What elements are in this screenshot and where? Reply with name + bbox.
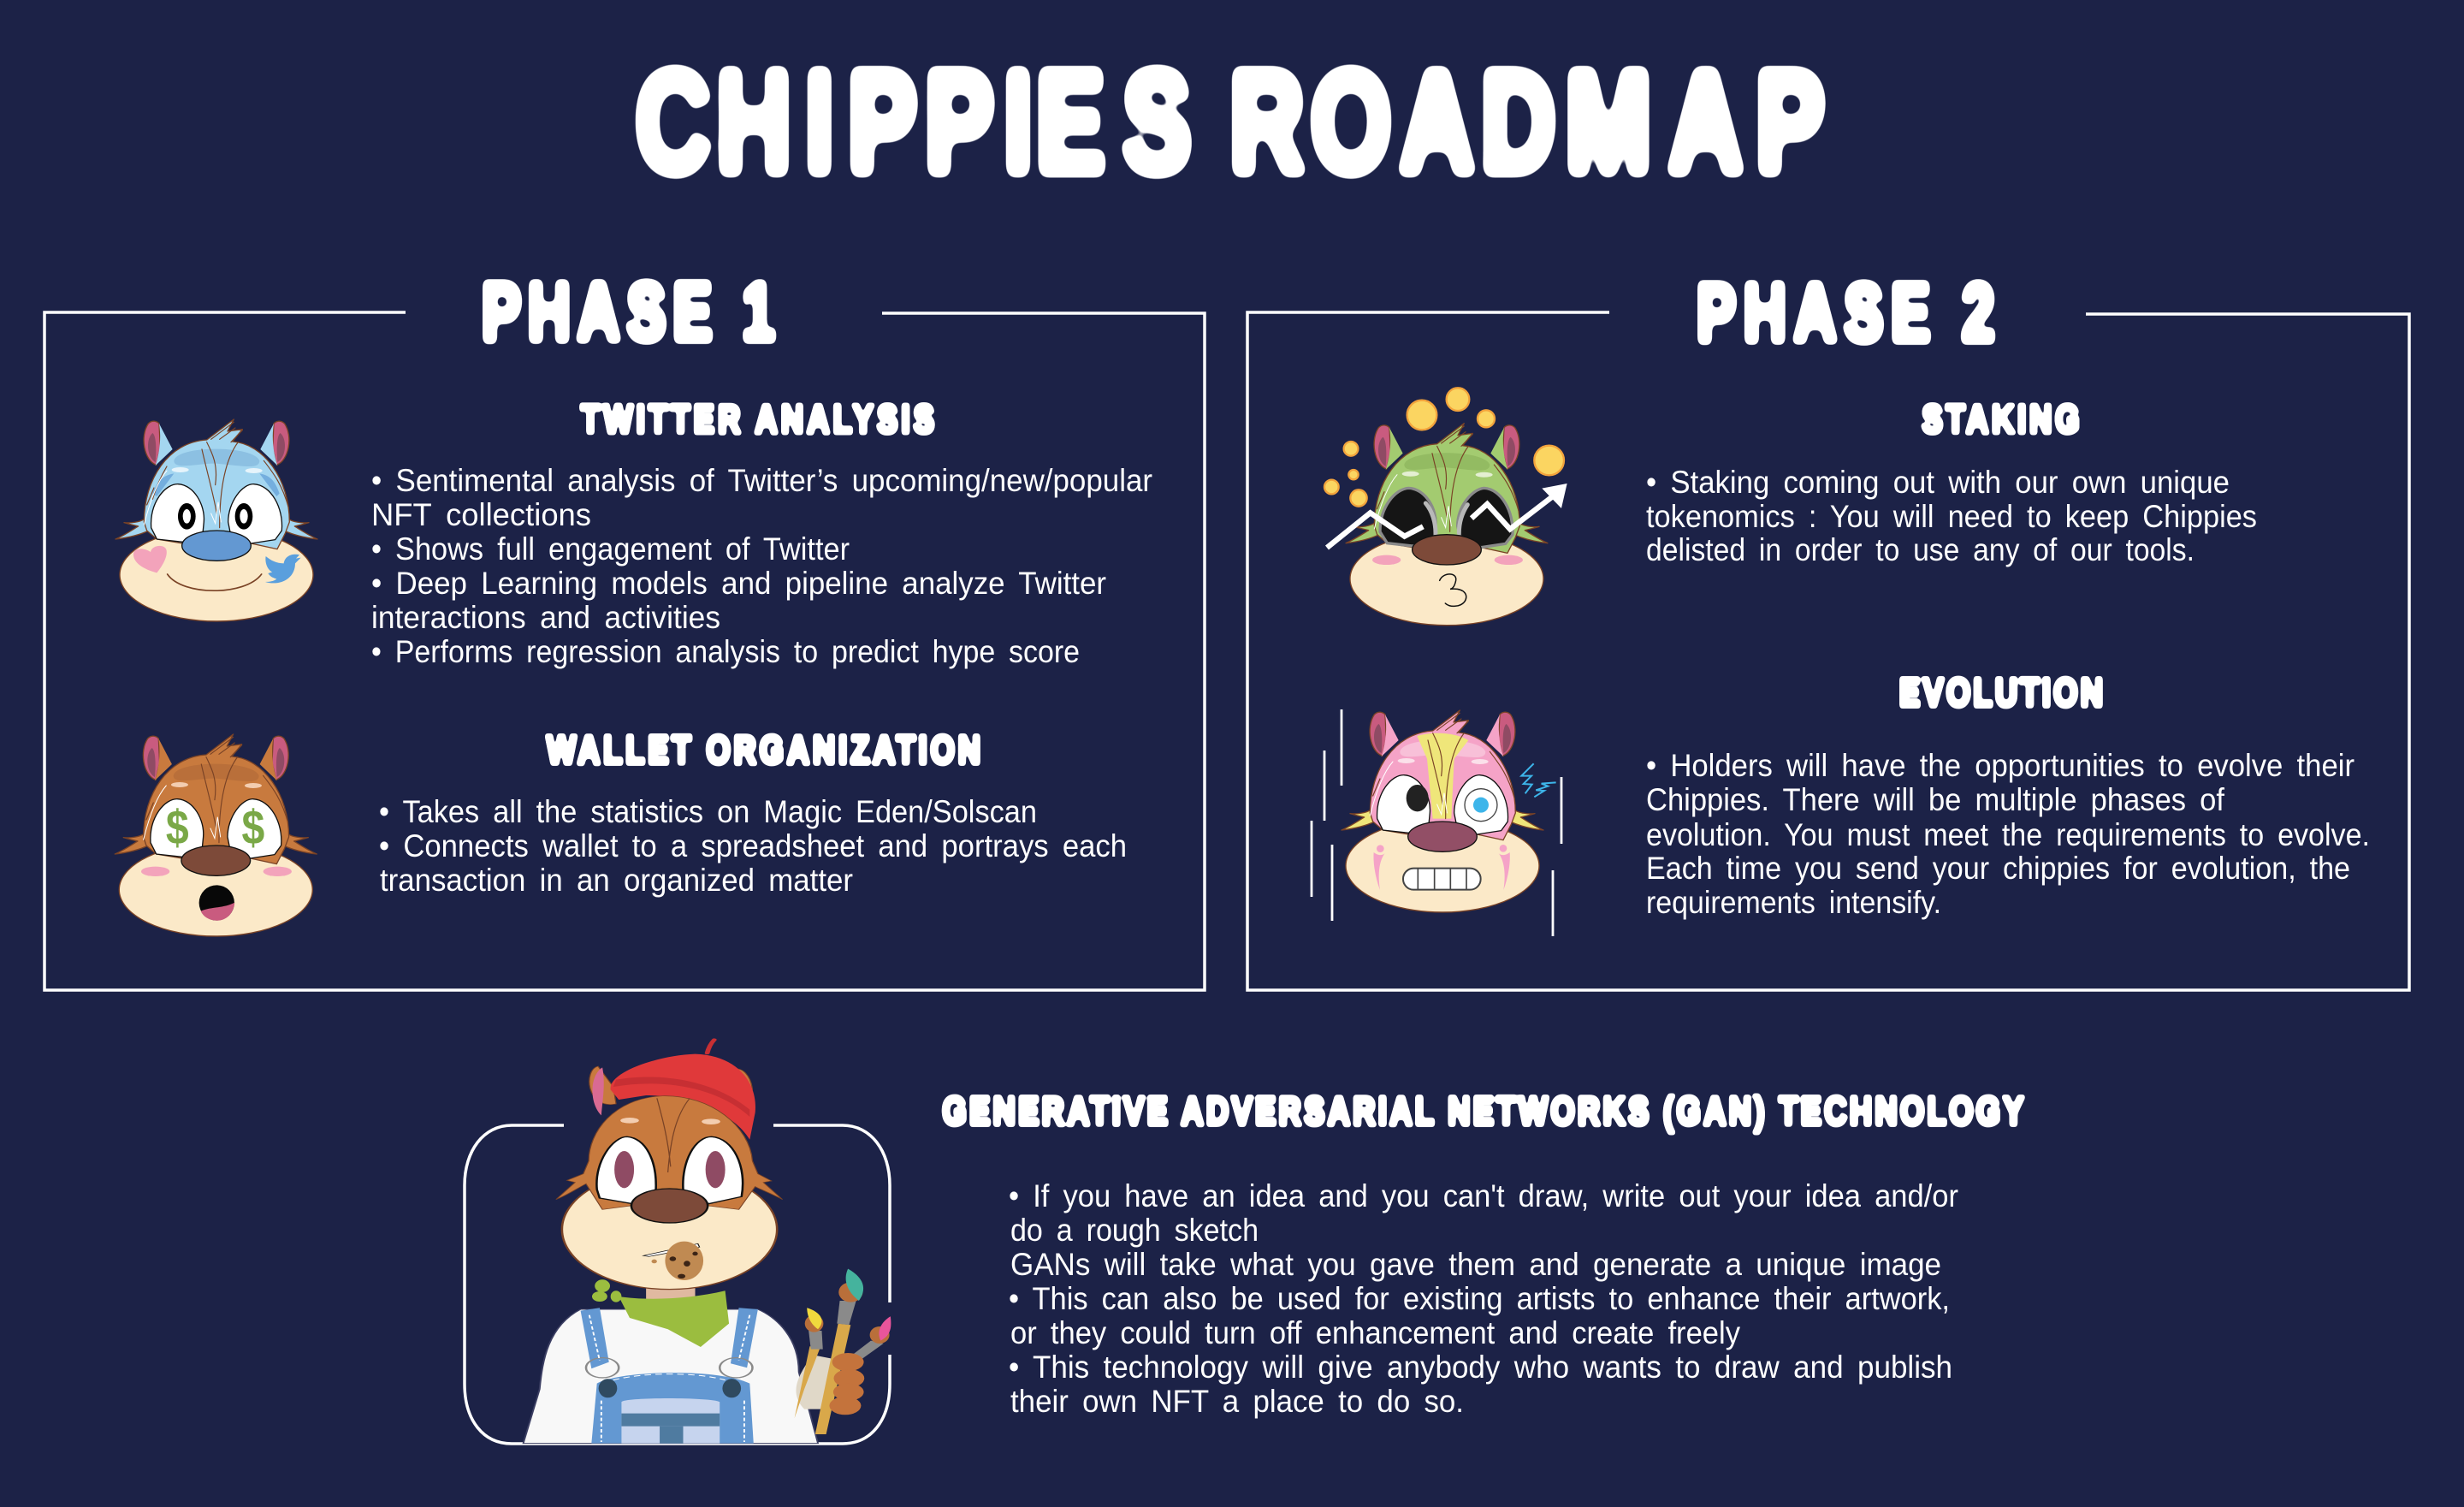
text: staking bullets: delisted in order to use any of our tools.: [1646, 532, 2194, 567]
icon: speed lines: [1312, 709, 1561, 936]
text: evolution bullets: Each time you send your chippies for evolution, the: [1646, 851, 2350, 886]
text: evolution bullets: requirements intensify.: [1646, 885, 1941, 920]
panel: GAN technology: [465, 1040, 2024, 1444]
cookie in mouth: [643, 1242, 703, 1280]
hand: [796, 1355, 843, 1409]
face: [562, 1170, 777, 1290]
rounded frame: [465, 1125, 890, 1444]
phase 1 heading: PHASE 1: [482, 265, 775, 358]
text: GAN bullets: GANs will take what you gave them and generate a unique image: [1010, 1247, 1941, 1282]
icon: gold coins: [1324, 388, 1564, 507]
phase 1 frame: [44, 312, 1205, 990]
text: twitter analysis bullets: • Deep Learning models and pipeline analyze Twitter: [371, 566, 1106, 601]
text: wallet organization bullets: • Takes all the statistics on Magic Eden/Solscan: [379, 794, 1037, 829]
text: wallet organization bullets: transaction in an organized matter: [380, 863, 853, 898]
title: CHIPPIES ROADMAP: [636, 42, 1825, 203]
fur: [556, 1096, 783, 1209]
text: GAN bullets: • This technology will give anybody who wants to draw and publish: [1009, 1350, 1952, 1385]
icon: pink chippy with mismatched eyes: [1342, 710, 1543, 912]
text: twitter analysis bullets: interactions and activities: [371, 600, 720, 635]
text: wallet organization bullets: [379, 794, 1127, 898]
icon: green chippy with goggles: [1346, 424, 1548, 626]
ears: [589, 1066, 752, 1115]
icon: rising arrow: [1327, 484, 1567, 548]
icon: brown chippy with dollar eyes: $: [242, 801, 264, 856]
text: twitter analysis bullets: NFT collections: [371, 497, 591, 532]
text: twitter analysis bullets: [371, 463, 1152, 669]
phase 2 frame: [1247, 312, 2409, 990]
text: GAN bullets: or they could turn off enhancement and create freely: [1010, 1315, 1740, 1350]
text: twitter analysis bullets: • Performs regression analysis to predict hype score: [371, 634, 1080, 669]
text: evolution bullets: • Holders will have the opportunities to evolve their: [1646, 748, 2354, 783]
heading: twitter analysis: TWITTER ANALYSIS: [581, 396, 934, 442]
icon: brown chippy with dollar eyes: [115, 734, 317, 936]
text: GAN bullets: their own NFT a place to do so.: [1010, 1384, 1464, 1419]
text: staking bullets: • Staking coming out with our own unique: [1646, 465, 2230, 500]
fingers: [829, 1353, 864, 1415]
text: GAN bullets: do a rough sketch: [1010, 1213, 1259, 1248]
text: evolution bullets: evolution. You must meet the requirements to evolve.: [1646, 817, 2370, 852]
heading: GAN technology: GENERATIVE ADVERSARIAL NETWORKS (GAN) TECHNOLOGY: [943, 1089, 2024, 1133]
text: evolution bullets: [1646, 748, 2370, 920]
icon: brown chippy with dollar eyes: $: [166, 801, 189, 856]
beret: [611, 1040, 755, 1140]
heading: wallet organization: WALLET ORGANIZATION: [547, 727, 980, 772]
overalls: [581, 1308, 758, 1444]
icon: blue shock bolts: [1521, 763, 1556, 797]
panel: phase 1: [44, 265, 1205, 990]
text: GAN bullets: • This can also be used for existing artists to enhance their artwork,: [1009, 1281, 1950, 1316]
scarf: [592, 1279, 729, 1347]
text: twitter analysis bullets: • Shows full engagement of Twitter: [371, 531, 850, 567]
eyes: [596, 1136, 743, 1204]
text: twitter analysis bullets: • Sentimental analysis of Twitter’s upcoming/new/popular: [371, 463, 1152, 498]
icon: artist chippy with beret, overalls and brushes: [524, 1040, 891, 1444]
text: evolution bullets: Chippies. There will be multiple phases of: [1646, 782, 2225, 817]
text: GAN bullets: [1009, 1178, 1958, 1419]
heading: evolution: EVOLUTION: [1899, 670, 2103, 715]
text: GAN bullets: • If you have an idea and you can't draw, write out your idea and/or: [1009, 1178, 1958, 1213]
nose: [631, 1189, 708, 1223]
panel: phase 2: [1247, 266, 2409, 990]
text: wallet organization bullets: • Connects wallet to a spreadsheet and portrays each: [379, 828, 1127, 863]
text: staking bullets: tokenomics : You will need to keep Chippies: [1646, 499, 2257, 534]
icon: blue chippy with twitter bird: [116, 419, 317, 621]
paint brushes: [795, 1269, 891, 1434]
heading: staking: STAKING: [1922, 396, 2080, 442]
phase 2 heading: PHASE 2: [1697, 266, 1994, 359]
text: staking bullets: [1646, 465, 2257, 567]
shirt: [524, 1309, 818, 1444]
